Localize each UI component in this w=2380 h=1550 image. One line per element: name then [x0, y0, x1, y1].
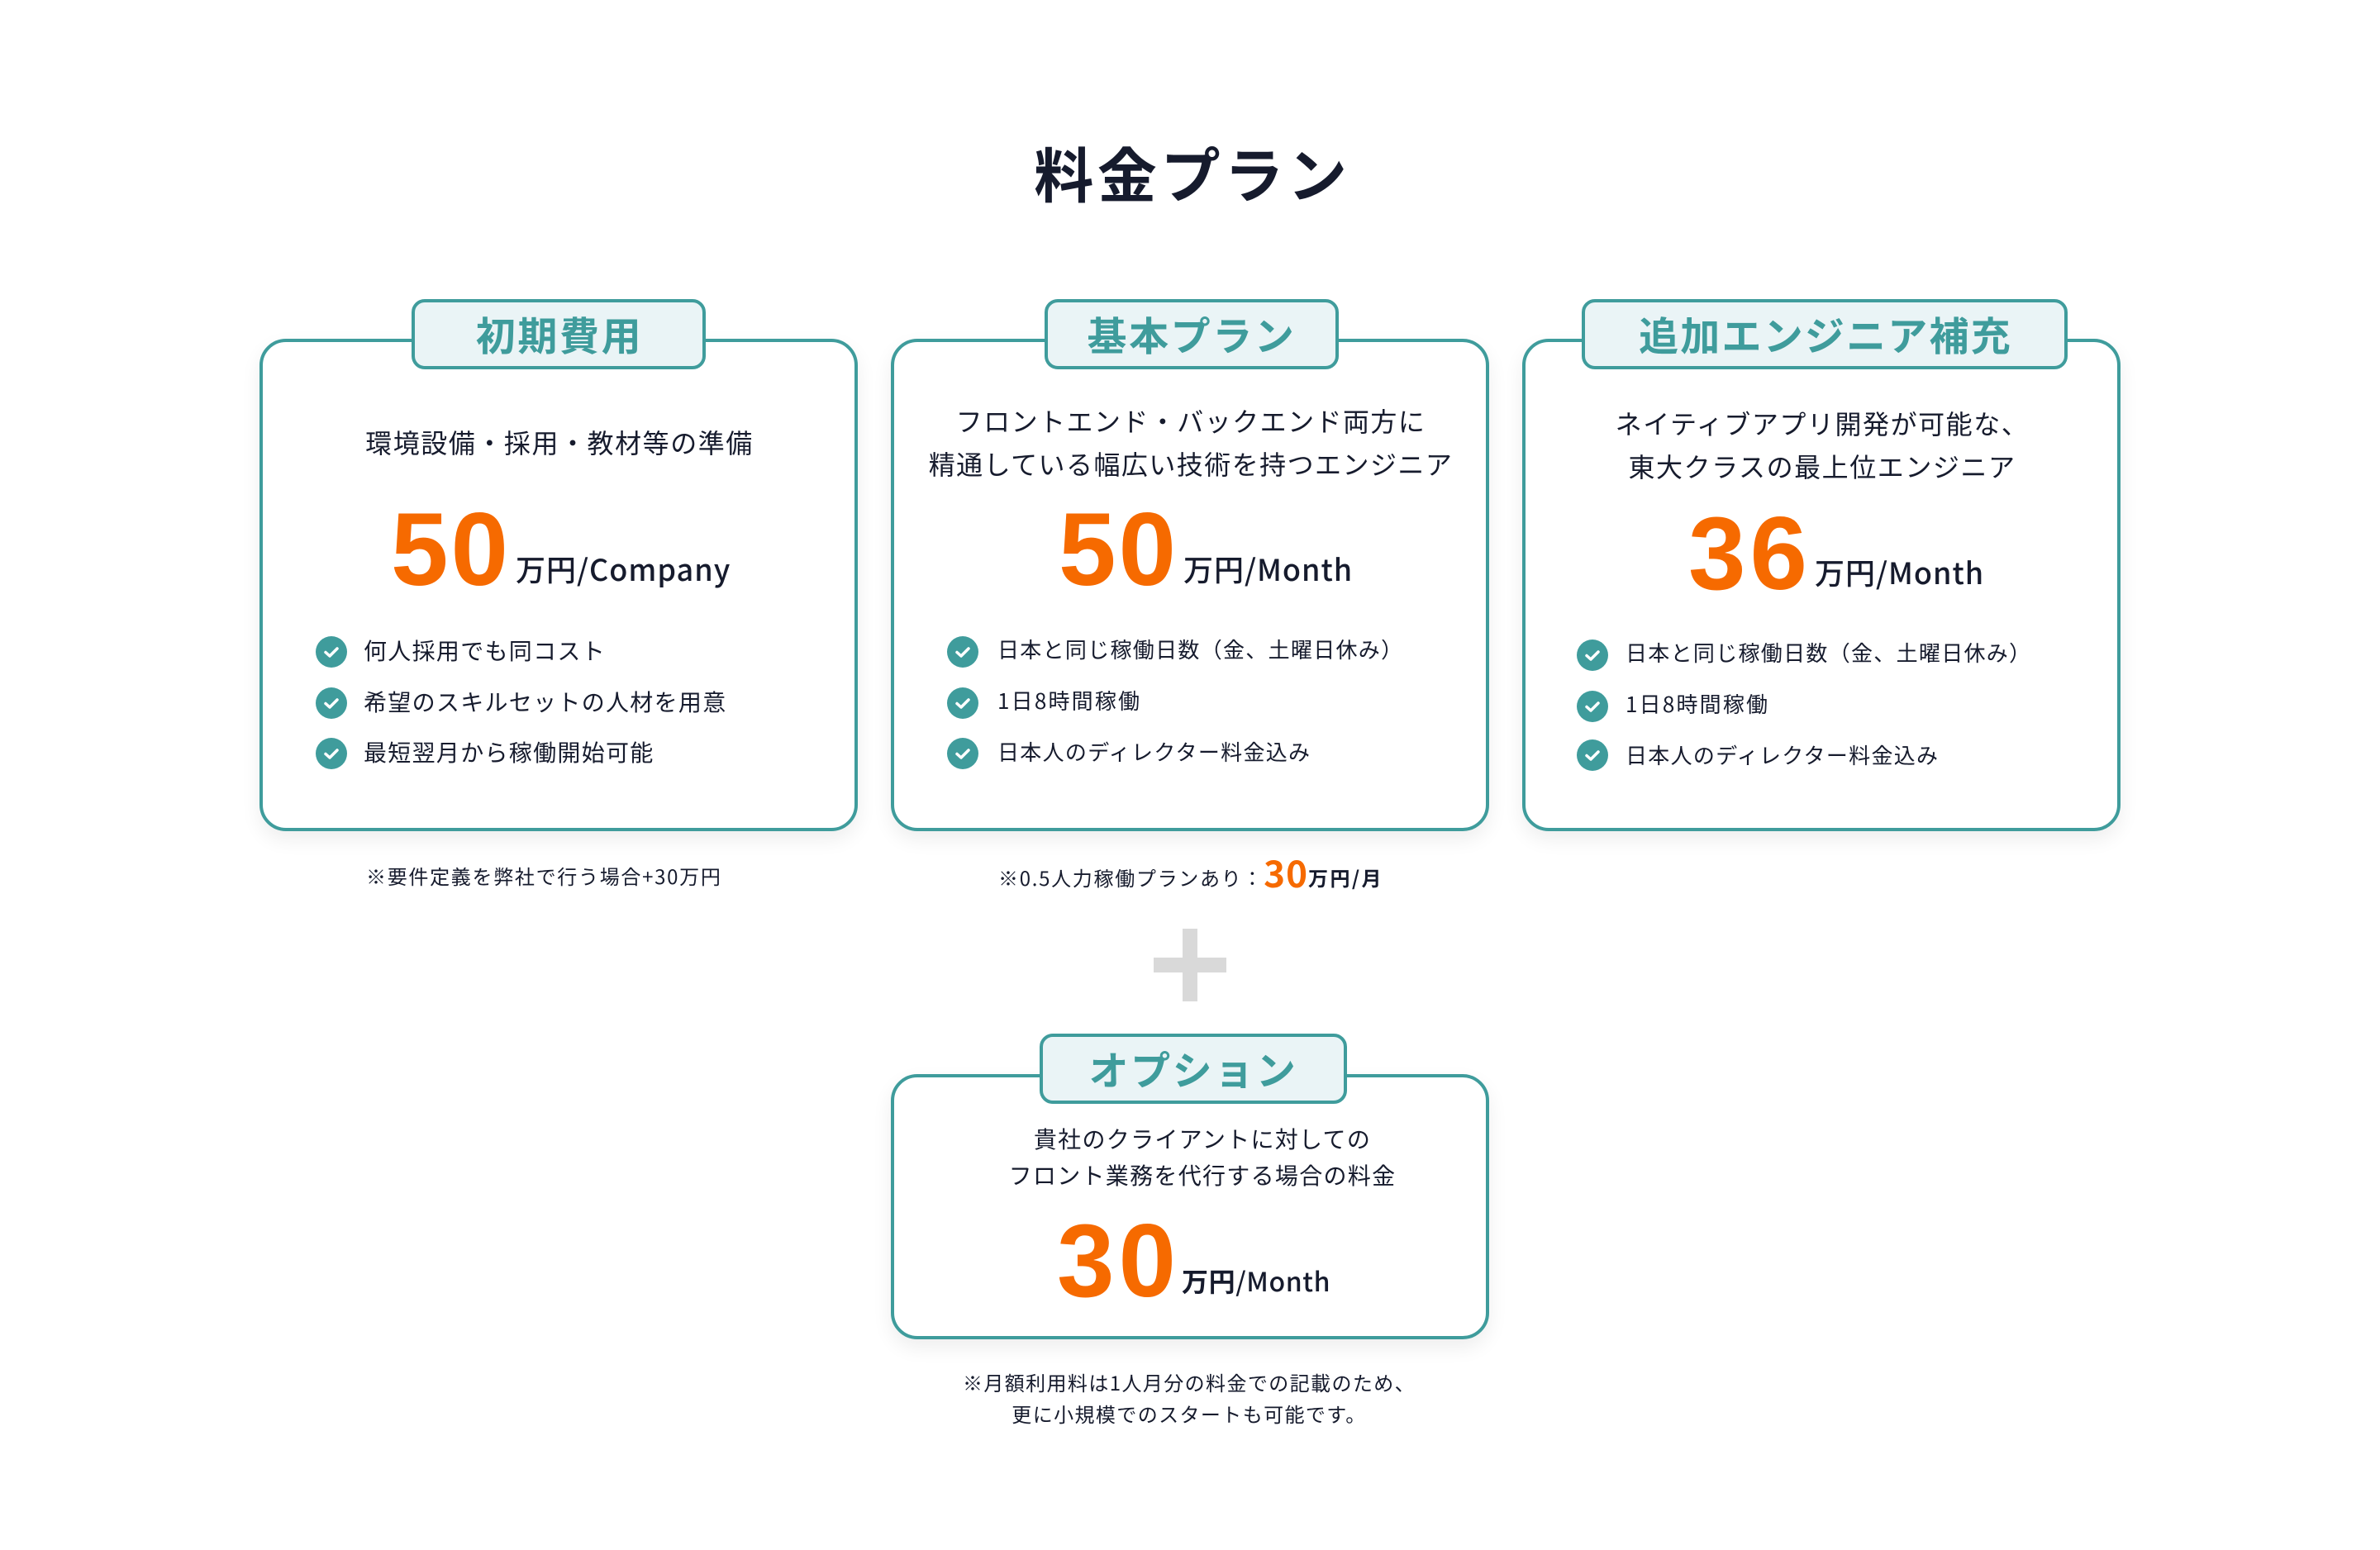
- note: option: ※月額利用料は1人月分の料金での記載のため、: [963, 1367, 1416, 1396]
- heading tab: 基本プラン: [1087, 304, 1296, 362]
- note: option: 更に小規模でのスタートも可能です。: [1011, 1398, 1367, 1428]
- list item 2: 1日8時間稼働: [997, 685, 1141, 716]
- description: [1616, 404, 2029, 485]
- description: フロント業務を代行する場合の料金: [1009, 1158, 1396, 1191]
- price unit: 万円/Month: [1182, 1262, 1330, 1300]
- price number: 50: [391, 492, 511, 607]
- note: initial cost: ※要件定義を弊社で行う場合+30万円: [366, 861, 722, 890]
- description: [1009, 1122, 1396, 1191]
- heading tab: [1582, 299, 2068, 369]
- price number: 36: [1688, 497, 1811, 611]
- list item 3: 最短翌月から稼働開始可能: [364, 735, 654, 768]
- card frame: [891, 339, 1489, 831]
- heading tab: [1040, 1034, 1347, 1104]
- list item 1: 何人採用でも同コスト: [364, 634, 606, 667]
- description: [929, 402, 1453, 483]
- description: 精通している幅広い技術を持つエンジニア: [929, 445, 1453, 483]
- price number: 30: [1057, 1204, 1180, 1319]
- list item 2: 1日8時間稼働: [1626, 688, 1769, 719]
- note: half-capacity plan: ※0.5人力稼働プランあり：30万円/月: [998, 845, 1383, 898]
- heading tab: オプション: [1088, 1039, 1297, 1096]
- heading tab: [412, 299, 706, 369]
- panel: option: [891, 1034, 1489, 1348]
- icon: check 2: [1577, 691, 1608, 722]
- list item 2: 希望のスキルセットの人材を用意: [364, 685, 727, 718]
- icon: check 2: [947, 687, 978, 719]
- icon: check 2: [316, 687, 347, 719]
- icon: check 3: [1577, 739, 1608, 771]
- list item 1: 日本と同じ稼働日数（金、土曜日休み）: [997, 634, 1403, 664]
- heading tab: [1045, 299, 1339, 369]
- icon: check 3: [947, 738, 978, 769]
- description: 東大クラスの最上位エンジニア: [1628, 447, 2016, 485]
- price unit: 万円/Month: [1183, 547, 1353, 590]
- panel: basic plan: [891, 299, 1489, 839]
- card frame: [1522, 339, 2121, 831]
- panel: additional engineers: [1522, 299, 2121, 839]
- list item 1: 日本と同じ稼働日数（金、土曜日休み）: [1626, 637, 2031, 668]
- card frame: [259, 339, 858, 831]
- description: 環境設備・採用・教材等の準備: [365, 423, 754, 461]
- card frame: [891, 1074, 1489, 1339]
- icon: check 3: [316, 738, 347, 769]
- description: ネイティブアプリ開発が可能な、: [1616, 404, 2029, 442]
- price number: 50: [1059, 492, 1178, 607]
- title: 料金プラン: [1034, 128, 1351, 215]
- heading tab: 追加エンジニア補充: [1639, 304, 2012, 362]
- icon: plus: [1154, 929, 1226, 1001]
- panel: initial cost: [259, 299, 858, 839]
- price unit: 万円/Month: [1815, 550, 1984, 593]
- heading tab: 初期費用: [476, 304, 643, 362]
- description: フロントエンド・バックエンド両方に: [956, 402, 1426, 440]
- description: 貴社のクライアントに対しての: [1034, 1122, 1371, 1155]
- note: option: [963, 1367, 1416, 1428]
- icon: check 1: [1577, 639, 1608, 671]
- price unit: 万円/Company: [516, 547, 731, 590]
- icon: check 1: [947, 636, 978, 668]
- list item 3: 日本人のディレクター料金込み: [1626, 739, 1939, 770]
- icon: check 1: [316, 636, 347, 668]
- list item 3: 日本人のディレクター料金込み: [997, 736, 1311, 767]
